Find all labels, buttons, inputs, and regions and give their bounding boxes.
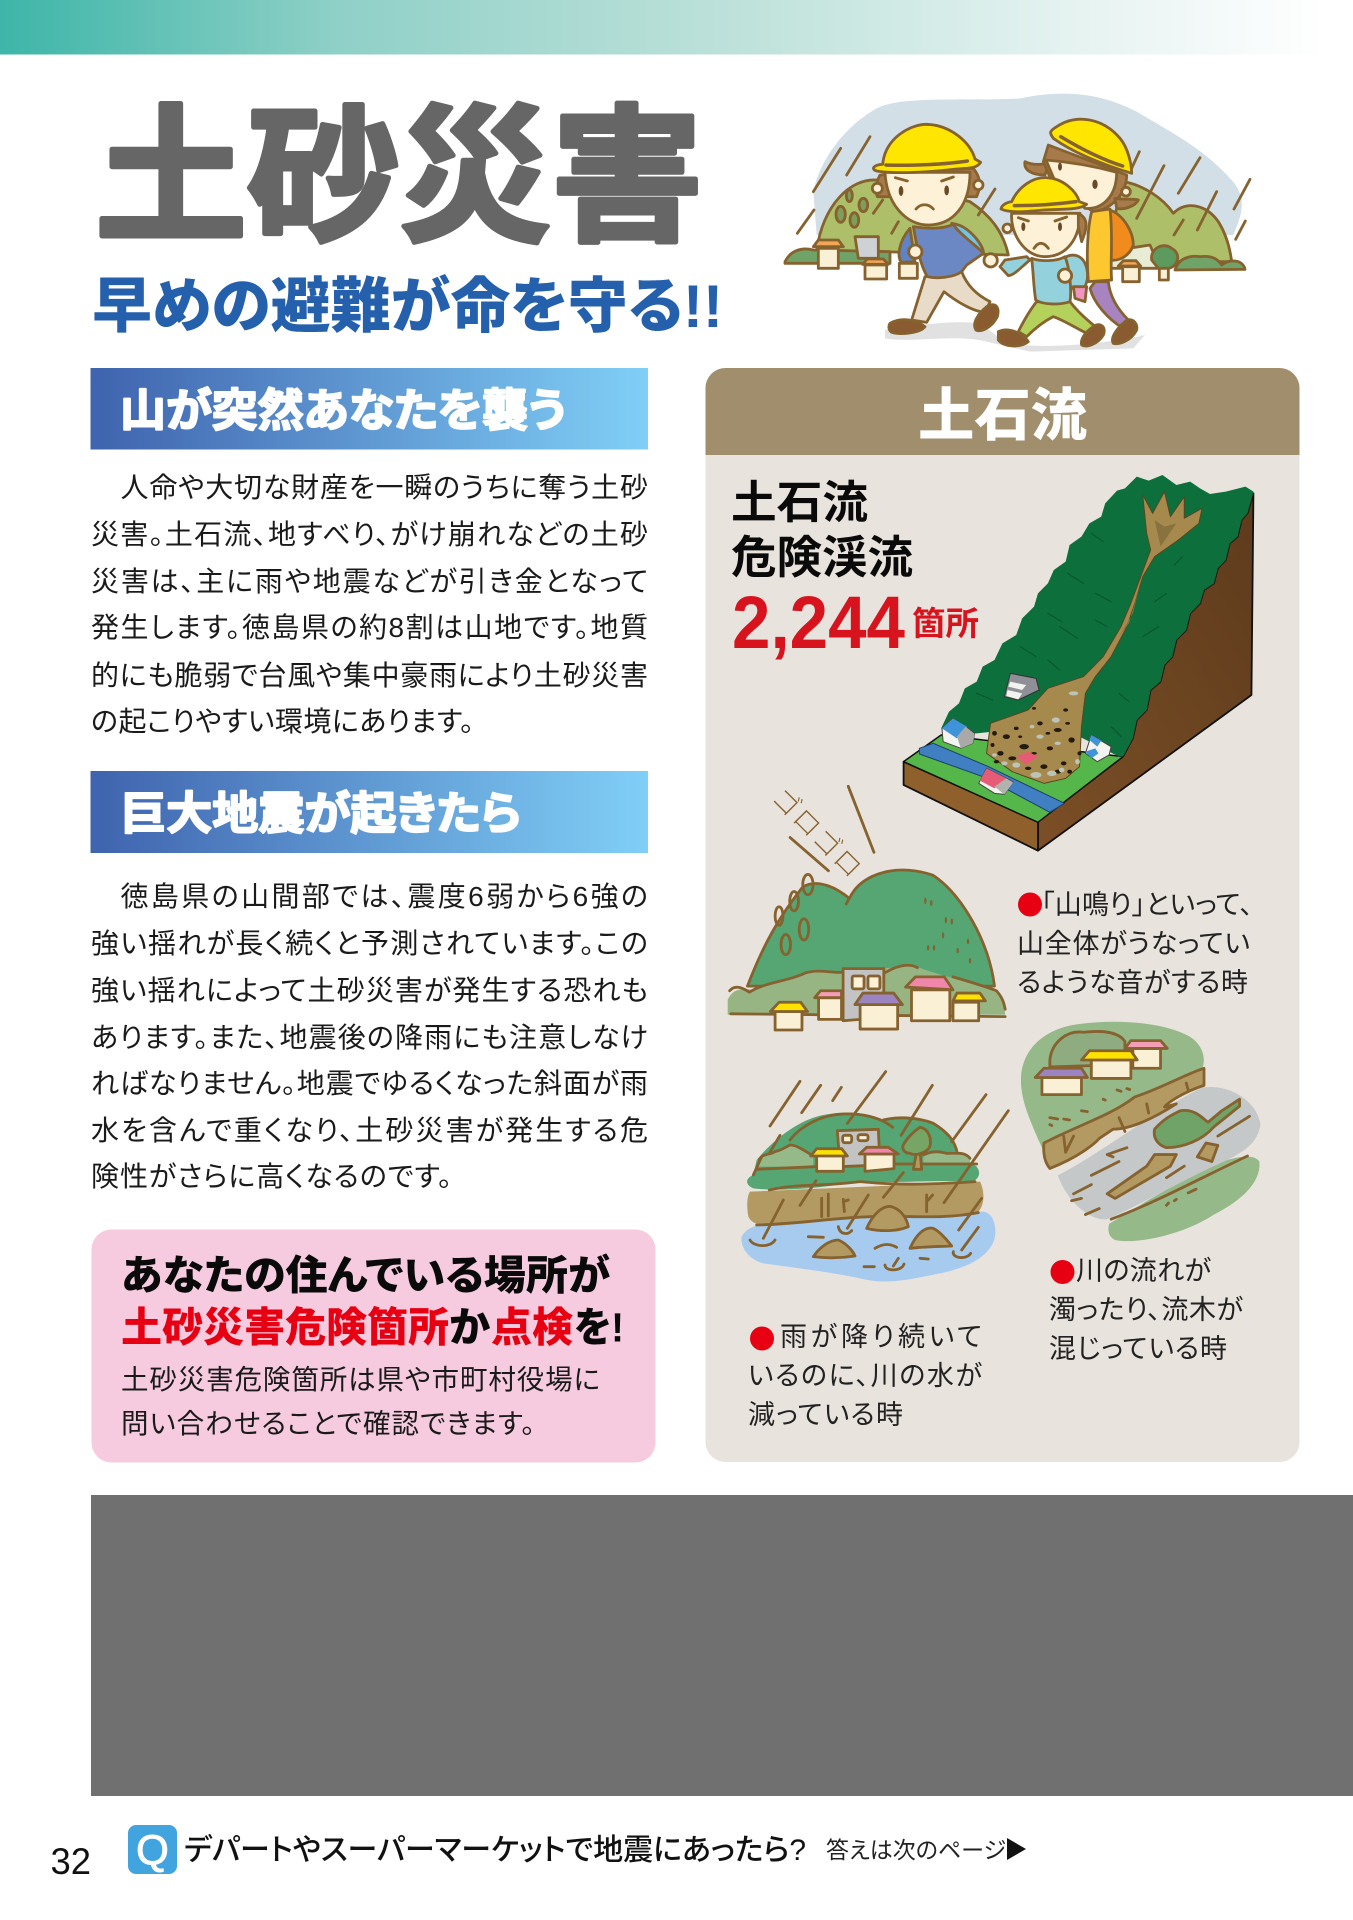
- illustration: river with muddy water and driftwood: [1021, 1022, 1261, 1241]
- text block: intro on landslide disasters: 的にも脆弱で台風や集中豪雨により土砂災害: [91, 660, 648, 691]
- text block: earthquake risk: ればなりません。地震でゆるくなった斜面が雨: [91, 1068, 648, 1099]
- caption: muddy river: 濁ったり、流木が: [1049, 1295, 1243, 1325]
- caption: muddy river: 混じっている時: [1049, 1334, 1227, 1364]
- grey rectangle placeholder: [91, 1495, 1353, 1796]
- illustration: family evacuating in the rain: [785, 94, 1250, 352]
- text block: earthquake risk: 強い揺れによって土砂災害が発生する恐れも: [91, 975, 648, 1006]
- caption: mountain rumbling: るような音がする時: [1017, 968, 1248, 998]
- title: 土砂災害: [95, 96, 703, 261]
- text block: earthquake risk: 険性がさらに高くなるのです。: [91, 1161, 452, 1192]
- caption: mountain rumbling: 「山鳴り」といって、: [1041, 890, 1253, 920]
- panel: heading mountain attacks suddenly: [90, 368, 648, 450]
- heading text: 巨大地震が起きたら: [120, 788, 521, 839]
- stat label: 土石流: [731, 477, 868, 528]
- caption: rain but river falling: [748, 1322, 982, 1430]
- callout body: 土砂災害危険箇所は県や市町村役場に: [121, 1364, 600, 1395]
- callout heading: か: [449, 1304, 490, 1350]
- icon: arrow right: [1007, 1838, 1026, 1860]
- text block: earthquake risk: あります。また、地震後の降雨にも注意しなけ: [91, 1022, 648, 1053]
- quiz question: デパートやスーパーマーケットで地震にあったら?: [184, 1834, 806, 1867]
- caption: rain but river falling: 雨が降り続いて: [780, 1322, 982, 1352]
- stat label: [731, 477, 913, 583]
- text block: earthquake risk: [91, 881, 648, 1192]
- panel: heading big earthquake: [90, 771, 648, 853]
- panel: debris flow: [706, 368, 1300, 1462]
- text block: intro on landslide disasters: の起こりやすい環境にあります。: [91, 706, 474, 737]
- text block: intro on landslide disasters: 人命や大切な財産を一瞬のうちに奪う土砂: [120, 472, 648, 503]
- caption: muddy river: 川の流れが: [1076, 1256, 1211, 1286]
- sound effect: rumbling text: ゴロゴロ: [767, 783, 867, 883]
- caption: mountain rumbling: [1017, 890, 1253, 998]
- text block: intro on landslide disasters: [91, 472, 648, 737]
- icon: Q badge: [128, 1825, 177, 1874]
- illustration: rain with falling river level: [741, 1072, 1008, 1281]
- subtitle: 早めの避難が命を守る!!: [92, 273, 723, 340]
- caption: rain but river falling: 減っている時: [748, 1400, 903, 1430]
- page number: 32: [50, 1841, 91, 1882]
- callout heading: を!: [574, 1304, 624, 1350]
- heading text: 山が突然あなたを襲う: [120, 385, 566, 436]
- text block: earthquake risk: 強い揺れが長く続くと予測されています。この: [91, 928, 648, 959]
- stat label: 危険渓流: [731, 532, 913, 583]
- panel header: 土石流: [918, 384, 1087, 448]
- callout heading: 土砂災害危険箇所: [121, 1304, 449, 1350]
- caption: rain but river falling: いるのに、川の水が: [748, 1361, 982, 1391]
- callout heading: 点検: [491, 1304, 573, 1350]
- text block: earthquake risk: 徳島県の山間部では、震度6弱から6強の: [120, 881, 648, 912]
- panel header: [706, 368, 1300, 455]
- callout body: [121, 1364, 600, 1439]
- stat number: 箇所: [912, 605, 979, 642]
- icon: Q badge: Q: [136, 1826, 169, 1873]
- answer pointer: 答えは次のページ: [826, 1837, 1006, 1863]
- illustration: debris flow slope diagram: [904, 475, 1253, 851]
- text block: earthquake risk: 水を含んで重くなり、土砂災害が発生する危: [91, 1115, 648, 1146]
- callout heading: [121, 1252, 624, 1350]
- illustration: rumbling mountain: [728, 786, 1005, 1030]
- caption: muddy river: [1049, 1256, 1243, 1364]
- stat number: 2,244: [732, 581, 905, 664]
- text block: intro on landslide disasters: 災害は、主に雨や地震などが引き金となって: [91, 566, 648, 597]
- caption: mountain rumbling: 山全体がうなってい: [1017, 929, 1250, 959]
- callout heading: あなたの住んでいる場所が: [121, 1252, 610, 1298]
- callout body: 問い合わせることで確認できます。: [121, 1408, 535, 1439]
- callout: check your area: [92, 1230, 656, 1462]
- top gradient band: [0, 0, 1353, 54]
- text block: intro on landslide disasters: 発生します。徳島県の約8割は山地です。地質: [91, 612, 648, 643]
- text block: intro on landslide disasters: 災害。土石流、地すべり、がけ崩れなどの土砂: [91, 519, 648, 550]
